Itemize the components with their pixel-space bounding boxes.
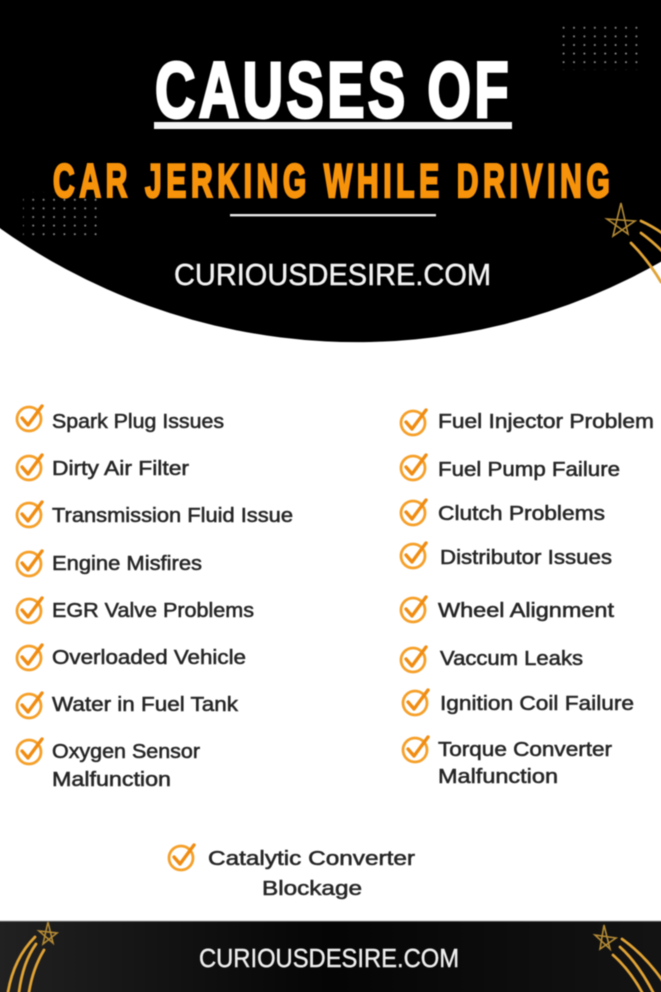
header website url: CURIOUSDESIRE.COM: [174, 257, 491, 292]
item: engine misfires: [17, 551, 202, 576]
item: overloaded vehicle: Overloaded Vehicle: [52, 646, 246, 669]
item: torque converter malfunction: Torque Converter: [438, 738, 612, 761]
footer website url: CURIOUSDESIRE.COM: [199, 943, 459, 973]
icon: shooting star footer right: [595, 925, 661, 992]
header black curved panel: [0, 0, 661, 342]
item: fuel pump failure: Fuel Pump Failure: [438, 458, 620, 481]
item: catalytic converter blockage: Catalytic Converter: [208, 847, 415, 870]
subtitle underline: [230, 214, 436, 216]
footer bar: [0, 920, 661, 992]
item: fuel pump failure: [401, 455, 620, 481]
item: oxygen sensor malfunction: Oxygen Sensor: [52, 740, 200, 763]
icon: shooting star footer left: [8, 922, 57, 992]
left column list: [17, 406, 293, 791]
item: catalytic converter blockage: [169, 845, 415, 900]
item: distributor issues: Distributor Issues: [440, 546, 612, 569]
item: vaccum leaks: [401, 647, 583, 672]
item: ignition coil failure: Ignition Coil Failure: [440, 692, 634, 715]
item: spark plug issues: Spark Plug Issues: [52, 410, 224, 433]
item: dirty air filter: [17, 455, 189, 480]
item: distributor issues: [401, 543, 612, 569]
item: transmission fluid issue: Transmission Fluid Issue: [52, 504, 293, 527]
item: ignition coil failure: [403, 690, 634, 715]
item: wheel alignment: [401, 597, 614, 622]
icon: shooting star header: [607, 203, 661, 282]
item: water in fuel tank: Water in Fuel Tank: [52, 693, 239, 716]
item: vaccum leaks: Vaccum Leaks: [440, 647, 583, 670]
item: torque converter malfunction: [403, 737, 612, 788]
title: causes of: CAUSES OF: [155, 46, 509, 134]
item: engine misfires: Engine Misfires: [52, 552, 202, 575]
item: oxygen sensor malfunction: Malfunction: [52, 768, 171, 791]
dot pattern top right: [559, 26, 645, 70]
item: clutch problems: [401, 500, 605, 525]
item: oxygen sensor malfunction: [17, 739, 200, 791]
item: spark plug issues: [17, 406, 224, 433]
item: wheel alignment: Wheel Alignment: [438, 599, 614, 622]
item: egr valve problems: EGR Valve Problems: [52, 599, 254, 622]
item: catalytic converter blockage: Blockage: [262, 877, 362, 900]
item: torque converter malfunction: Malfunction: [438, 765, 558, 788]
item: fuel injector problem: Fuel Injector Problem: [438, 410, 654, 433]
dot pattern left: [23, 192, 104, 236]
item: clutch problems: Clutch Problems: [438, 502, 605, 525]
item: dirty air filter: Dirty Air Filter: [52, 457, 189, 480]
subtitle: car jerking while driving: CAR JERKING WHILE DRIVING: [53, 155, 610, 208]
right column list: [401, 410, 654, 788]
